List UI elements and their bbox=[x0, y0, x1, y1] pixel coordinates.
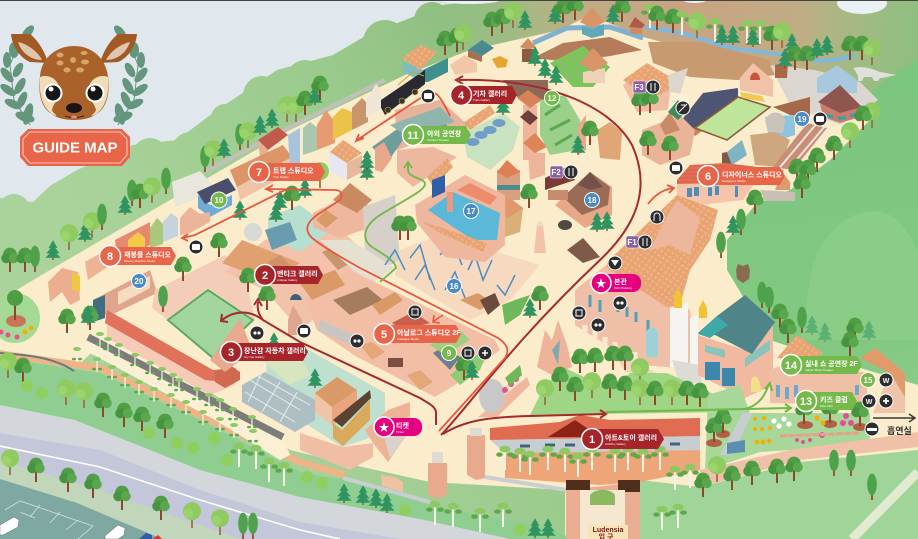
grey perimeter wall bbox=[343, 477, 567, 502]
pink fins in front of main bbox=[537, 320, 660, 375]
F3 building bbox=[623, 63, 688, 112]
camera and facility icons bbox=[188, 88, 894, 408]
arrow: studio 7 head bbox=[266, 185, 273, 192]
route: dark red to gallery 2 and 3 bbox=[221, 299, 436, 425]
dark fence in palm strip bbox=[88, 337, 283, 437]
label 11 outdoor theater: Outdoor Theater bbox=[427, 138, 449, 142]
grey boundary wall bbox=[205, 80, 385, 172]
entrance gate bbox=[566, 480, 640, 539]
stairs bbox=[773, 123, 827, 170]
grey pavement bbox=[770, 65, 878, 125]
label 4 train gallery bbox=[450, 84, 517, 106]
label 2 antique gallery: 2 bbox=[262, 270, 268, 282]
blue number markers bbox=[132, 112, 810, 294]
label 6 designers studio: 6 bbox=[705, 171, 711, 183]
camera and facility icons: W bbox=[866, 399, 873, 406]
guide map banner: GUIDE MAP bbox=[32, 140, 118, 156]
label 2 antique gallery: Antique Gallery bbox=[277, 278, 298, 282]
label 11 outdoor theater: 11 bbox=[407, 130, 419, 142]
label 14 indoor show theater: 실내 쇼 공연장 2F bbox=[805, 359, 858, 368]
blue number markers: 20 bbox=[135, 277, 144, 286]
guide map banner bbox=[20, 129, 130, 166]
route: dark red to gallery 1 bbox=[443, 414, 605, 434]
camera and facility icons: W bbox=[883, 378, 890, 385]
flower planter and egg bbox=[478, 365, 530, 417]
road: purple band bbox=[0, 433, 400, 539]
building under orange route bbox=[313, 183, 372, 238]
floor markers with restaurant icons bbox=[550, 80, 660, 250]
stage area bbox=[372, 100, 468, 187]
arrow: kids club head bbox=[785, 404, 791, 412]
kids club building bbox=[770, 335, 905, 413]
green number markers: 10 bbox=[215, 196, 224, 205]
blue number markers: 19 bbox=[798, 115, 807, 124]
parking lot bbox=[0, 479, 162, 539]
cobbled path bbox=[363, 195, 400, 268]
designer studio 6 bbox=[677, 163, 795, 205]
site trees bbox=[58, 46, 679, 388]
label 14 indoor show theater: Indoor Show Theater bbox=[805, 368, 833, 372]
green number markers: 15 bbox=[864, 376, 873, 385]
floor markers with restaurant icons: F2 bbox=[551, 168, 561, 177]
label 1 art and toy gallery: 1 bbox=[589, 434, 595, 446]
floor markers with restaurant icons: F1 bbox=[627, 238, 637, 247]
small palms near path bbox=[804, 315, 877, 342]
route: orange to studio 4 side bbox=[356, 92, 450, 141]
steam train bbox=[378, 70, 425, 115]
label 5 analogue studio: Analogue Studio bbox=[397, 337, 419, 341]
label 8 sewing machine studio: Sewing Machine Studio bbox=[124, 259, 156, 263]
glass frames 16 area bbox=[385, 235, 540, 325]
station bbox=[402, 45, 448, 82]
long wall with red roof bbox=[105, 310, 240, 395]
hill: right green slope bbox=[700, 60, 918, 539]
deer head bbox=[11, 34, 137, 120]
green number markers: 9 bbox=[447, 349, 452, 358]
arrow: studio 5 bbox=[433, 315, 443, 323]
gazebo and lighthouse bbox=[534, 220, 600, 263]
towers at entrance bbox=[428, 428, 485, 499]
clouds overlapping the slope bbox=[440, 0, 887, 14]
pale green courtyard bbox=[463, 113, 520, 170]
deer laurel wreath bbox=[0, 23, 150, 126]
grey wall enclosure bbox=[172, 171, 212, 207]
owl bbox=[736, 264, 750, 283]
label 8 sewing machine studio: 재봉틀 스튜디오 bbox=[124, 250, 172, 259]
building 20 bbox=[93, 270, 157, 322]
label 13 kids club: 키즈 클럽 bbox=[820, 395, 848, 404]
blue number markers: 17 bbox=[467, 207, 476, 216]
guide map badge bbox=[0, 23, 150, 166]
parked cars bbox=[0, 517, 162, 539]
strip beside parking bbox=[0, 460, 240, 539]
kids club grounds bbox=[700, 385, 918, 487]
label 1 art and toy gallery bbox=[582, 428, 664, 450]
label 4 train gallery: 기차 갤러리 bbox=[473, 89, 507, 98]
label 7 trap studio bbox=[248, 162, 325, 182]
label 3 toy car gallery bbox=[220, 342, 308, 362]
blue fence wall bbox=[533, 27, 643, 43]
label 3 toy car gallery: Toy Car Gallery bbox=[244, 355, 265, 359]
blue number markers: 16 bbox=[450, 282, 459, 291]
label 11 outdoor theater bbox=[402, 124, 471, 146]
route: green to outdoor theater bbox=[365, 162, 425, 282]
studio 10 blue building bbox=[197, 178, 236, 217]
label main building bbox=[591, 273, 641, 293]
stream bbox=[645, 27, 855, 60]
label 13 kids club: 13 bbox=[800, 396, 812, 408]
flowers patch by yard bbox=[262, 345, 310, 385]
greenhouse small bbox=[722, 140, 747, 165]
label 14 indoor show theater: 14 bbox=[785, 360, 798, 372]
left pink gate building bbox=[48, 268, 80, 305]
label 8 sewing machine studio: 8 bbox=[107, 251, 113, 263]
central towers bbox=[495, 80, 548, 237]
small orange gate bbox=[381, 475, 403, 492]
label 1 art and toy gallery: 아트&토이 갤러리 bbox=[605, 433, 657, 442]
hill: brown top right slope bbox=[400, 0, 918, 270]
label 6 designers studio bbox=[698, 166, 785, 186]
label main building: 본관 bbox=[614, 277, 627, 286]
blue pyramid bbox=[817, 65, 857, 93]
white corner building bbox=[329, 140, 362, 180]
yellow arch bbox=[751, 376, 762, 392]
dark roof building bbox=[680, 88, 738, 136]
label 7 trap studio: 7 bbox=[256, 167, 262, 179]
building 18 bbox=[555, 122, 622, 228]
studio wing left of 6 bbox=[642, 92, 695, 165]
parking bays bbox=[5, 501, 93, 539]
label 7 trap studio: Trap Studio bbox=[273, 175, 289, 179]
pink wall by ticket bbox=[300, 433, 373, 470]
main building bbox=[575, 195, 718, 370]
label 2 antique gallery bbox=[254, 264, 323, 286]
arrow: gallery 1 head bbox=[600, 410, 606, 418]
green strip along the road bbox=[0, 358, 575, 539]
smoking room label: 흡연실 bbox=[887, 425, 912, 436]
kids club flowers bbox=[705, 399, 869, 447]
route: green to indoor theater bbox=[745, 383, 772, 409]
orchard trees bbox=[536, 346, 709, 407]
brown plaza bbox=[648, 42, 775, 80]
road: light grey band bbox=[0, 405, 510, 539]
palm strip cream bbox=[75, 340, 290, 460]
route: green to kids club bbox=[606, 408, 790, 412]
route: orange to studio 5 and 7/8 bbox=[268, 189, 507, 431]
orange fence bbox=[0, 354, 345, 475]
greenhouse grid bbox=[242, 372, 315, 432]
arrow: studio 6 bbox=[648, 185, 674, 204]
gallery 3 pink fins bbox=[210, 318, 250, 372]
label 4 train gallery: Train Gallery bbox=[473, 98, 491, 102]
teal roof building bbox=[698, 295, 775, 398]
left dark rail bbox=[0, 353, 74, 371]
label 5 analogue studio: 5 bbox=[381, 329, 387, 341]
label 5 analogue studio: 아날로그 스튜디오 2F bbox=[397, 328, 461, 337]
palm row bbox=[72, 332, 258, 444]
gate sign text: Ludensia bbox=[593, 527, 623, 534]
label 14 indoor show theater bbox=[780, 354, 862, 376]
antique gallery cluster bbox=[222, 205, 372, 335]
orchard lawn bbox=[530, 368, 732, 415]
label ticket: ★ bbox=[378, 422, 390, 434]
label 6 designers studio: 디자이너스 스튜디오 bbox=[722, 170, 782, 179]
smoking room icon bbox=[864, 422, 880, 436]
lower right meadow bbox=[640, 440, 918, 539]
main hall top bbox=[740, 62, 788, 102]
pink yard behind lawn bbox=[152, 255, 255, 320]
blue number markers: 18 bbox=[588, 196, 597, 205]
pale street segment bbox=[320, 240, 395, 285]
green number markers bbox=[211, 90, 876, 388]
green number markers: 12 bbox=[548, 94, 557, 103]
vineyard bbox=[550, 46, 610, 87]
white towers with gold tops bbox=[670, 288, 707, 385]
row houses top left bbox=[303, 84, 381, 155]
label 3 toy car gallery: 3 bbox=[228, 347, 234, 359]
floor markers with restaurant icons: F3 bbox=[634, 83, 644, 92]
route: orange to studio 8 bbox=[182, 190, 285, 241]
studio 5 mass bbox=[300, 270, 500, 397]
smoking area arrow bbox=[873, 414, 915, 422]
label 8 sewing machine studio bbox=[100, 246, 176, 266]
label 5 analogue studio bbox=[374, 324, 461, 344]
label ticket: Ticket bbox=[396, 430, 404, 434]
brown ramp bbox=[533, 37, 642, 62]
ticket building bbox=[365, 402, 410, 462]
label 13 kids club bbox=[796, 390, 857, 412]
lawn bbox=[695, 97, 770, 140]
top-left studios bbox=[230, 127, 300, 200]
left plaza circle bbox=[0, 290, 40, 343]
art and toy gallery bbox=[490, 415, 700, 485]
label 2 antique gallery: 앤티크 갤러리 bbox=[277, 269, 318, 278]
pale path in meadow bbox=[852, 472, 918, 539]
label ticket: 티켓 bbox=[396, 421, 409, 430]
label 4 train gallery: 4 bbox=[458, 90, 465, 102]
pavilions top bbox=[450, 7, 645, 83]
top edge line bbox=[0, 0, 918, 1]
hill: lighter knoll bbox=[800, 211, 918, 340]
pool complex bbox=[415, 175, 505, 262]
label 3 toy car gallery: 장난감 자동차 갤러리 bbox=[244, 346, 306, 355]
arrow: gallery 4 head bbox=[456, 76, 463, 84]
long roof and umbrellas bbox=[463, 105, 506, 146]
label ticket bbox=[374, 417, 422, 437]
barn and orange roofed building bbox=[315, 377, 371, 446]
label main building: Main Building bbox=[614, 286, 632, 290]
label 7 trap studio: 트랩 스튜디오 bbox=[273, 166, 314, 175]
white dinosaur bbox=[853, 67, 897, 81]
F2 kiosks bbox=[545, 165, 575, 200]
lawn courtyard bbox=[168, 290, 253, 358]
garden 12 bbox=[540, 95, 586, 155]
rocks and pond bbox=[750, 112, 795, 167]
label 13 kids club: Kids Club bbox=[820, 404, 833, 408]
label 6 designers studio: Designer's Studio bbox=[722, 179, 746, 183]
road: white center line bbox=[0, 446, 340, 539]
gallery palms bbox=[496, 446, 699, 490]
rotunda bbox=[818, 85, 862, 123]
wooden deck bbox=[773, 97, 810, 117]
route: dark red loop to gallery 4 bbox=[441, 80, 641, 435]
label 1 art and toy gallery: Art&Toy Gallery bbox=[605, 442, 626, 446]
label main building: ★ bbox=[596, 278, 606, 290]
road trees bbox=[0, 352, 556, 539]
label 11 outdoor theater: 야외 공연장 bbox=[427, 129, 462, 138]
houses along left street bbox=[85, 207, 210, 280]
pale teal yard bbox=[265, 345, 385, 447]
